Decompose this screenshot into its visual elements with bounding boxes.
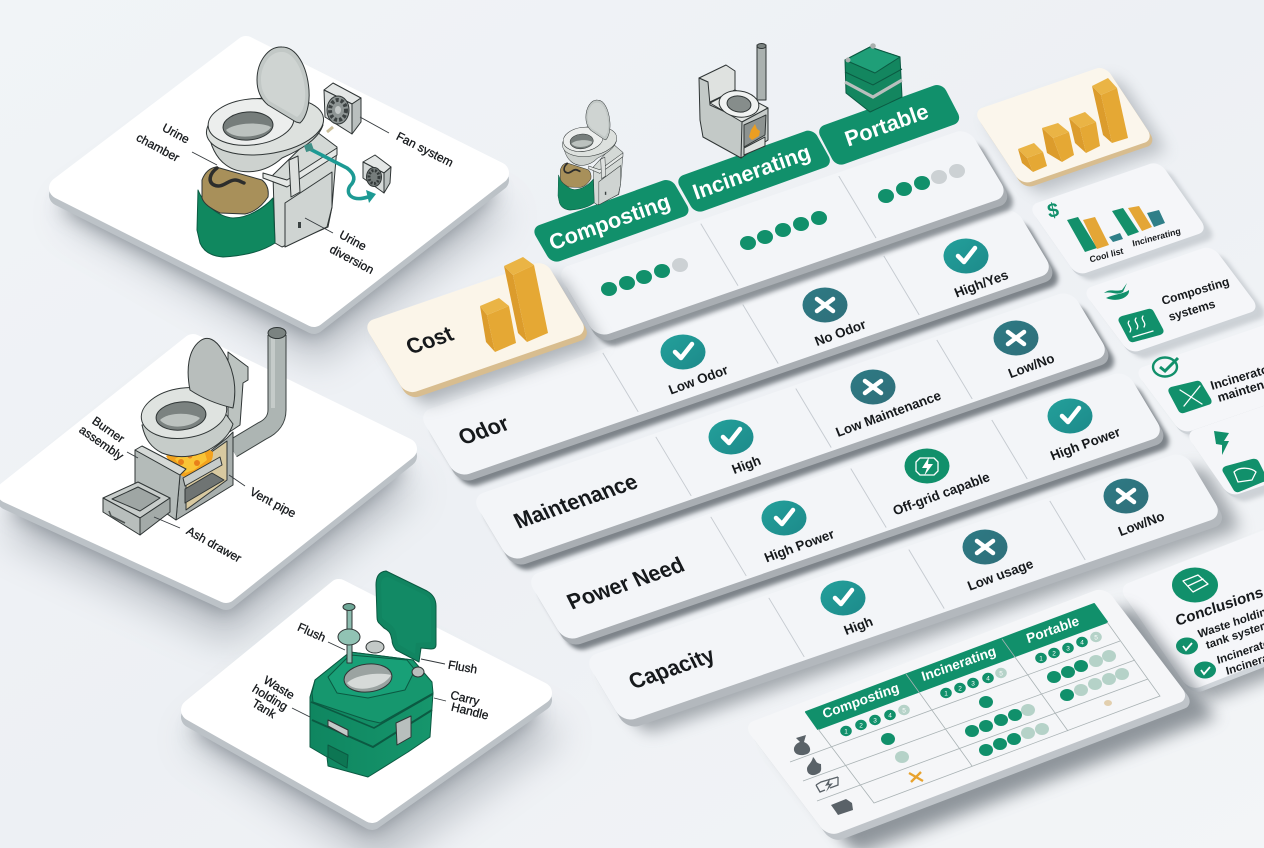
cell: low usage: Low usage xyxy=(965,556,1035,594)
dot numbers: 1 xyxy=(844,728,848,736)
dot numbers: 4 xyxy=(888,712,892,720)
dot numbers: 1 xyxy=(1039,656,1043,662)
row label: maintenance: Maintenance xyxy=(509,469,642,533)
label: waste holding tank: holding xyxy=(250,682,290,714)
illustration: composting toilet xyxy=(197,47,337,257)
icon: large fan xyxy=(324,83,361,134)
label: urine diversion: Urine xyxy=(337,228,369,254)
card: cost label xyxy=(363,257,603,409)
cell: no odor xyxy=(802,288,868,349)
icon: battery xyxy=(816,777,838,792)
panel: summary table: Incinerating xyxy=(920,643,998,684)
cell: high power composting: High Power xyxy=(762,526,836,565)
icon: dollar sign: $ xyxy=(1045,199,1061,223)
row label: capacity: Capacity xyxy=(624,642,719,694)
label: carry handle: Carry xyxy=(449,688,481,708)
card: rising bars xyxy=(973,64,1167,197)
cell: high capacity: High xyxy=(842,614,875,638)
header tab: portable xyxy=(816,83,962,167)
illustration: small composting toilet xyxy=(558,100,623,210)
cell: off-grid capable: Off-grid capable xyxy=(891,469,992,518)
label: burner assembly: Burner xyxy=(90,414,127,446)
dot numbers: 2 xyxy=(958,686,962,692)
dot numbers: 5 xyxy=(1094,634,1098,642)
label: waste holding tank: Waste xyxy=(261,673,297,702)
label: vent pipe: Vent pipe xyxy=(247,485,299,521)
icon: conclusion check 1 xyxy=(1176,638,1198,654)
cell: low usage xyxy=(962,530,1035,594)
cell: no odor: No Odor xyxy=(813,317,868,349)
panel: summary table: Portable xyxy=(1025,613,1081,646)
icon: leaf xyxy=(1104,283,1129,300)
cell: low odor xyxy=(660,334,730,397)
cell: low or no maintenance xyxy=(994,320,1057,381)
cell: high capacity xyxy=(820,580,875,638)
card: incinerators maintenance xyxy=(1134,321,1264,442)
dot numbers: 2 xyxy=(859,722,863,730)
cell: low maintenance: Low Maintenance xyxy=(833,388,943,440)
illustration: small incinerating toilet xyxy=(699,44,768,158)
label: fan system: Fan system xyxy=(394,129,456,170)
illustration: portable toilet xyxy=(310,571,436,777)
icon: conclusion check 2 xyxy=(1194,662,1216,678)
label: waste holding tank: Tank xyxy=(250,696,279,722)
icon: list circle xyxy=(1172,568,1218,602)
row: capacity xyxy=(584,448,1243,739)
icon: tools square xyxy=(1168,381,1212,413)
icon: tray square xyxy=(1222,459,1264,492)
illustration: small portable toilet xyxy=(845,43,902,112)
card: composting systems xyxy=(1082,244,1264,362)
cell: low odor: Low Odor xyxy=(666,362,730,397)
row: odor xyxy=(418,206,1063,490)
rating dots: incinerating cost xyxy=(740,211,827,250)
dot numbers xyxy=(844,634,1098,736)
label: ash drawer: Ash drawer xyxy=(184,524,244,565)
icon: lightning bolt xyxy=(1214,431,1229,455)
rating dots: composting cost xyxy=(601,258,688,296)
dot numbers: 1 xyxy=(944,690,948,698)
dot numbers: 5 xyxy=(902,708,906,714)
card: conclusions xyxy=(1118,518,1264,705)
chart: cost bars xyxy=(480,257,548,352)
dot numbers: 5 xyxy=(999,670,1003,678)
label: waste holding tank xyxy=(250,673,297,722)
dot numbers: 3 xyxy=(1066,646,1070,652)
dot numbers: 4 xyxy=(986,676,990,682)
header tab: incinerating xyxy=(675,128,833,214)
cell: low or no capacity: Low/No xyxy=(1116,509,1167,539)
card: composting systems: Composting xyxy=(1160,274,1231,308)
header tab: portable: Portable xyxy=(841,98,932,151)
card: cost comparison mini chart: Cool list xyxy=(1089,246,1124,264)
dot numbers: 2 xyxy=(1052,650,1056,658)
panel: summary table: Composting xyxy=(821,680,901,721)
card: composting systems: systems xyxy=(1167,297,1217,324)
cell: low or no capacity xyxy=(1104,478,1167,539)
row: cost dots xyxy=(556,127,1018,350)
panel: summary table xyxy=(743,583,1217,848)
row label: power need: Power Need xyxy=(563,552,688,614)
cell: high power composting xyxy=(762,500,836,565)
cell: high power portable xyxy=(1048,398,1122,463)
label: flush left: Flush xyxy=(295,620,328,645)
label: burner assembly: assembly xyxy=(77,422,126,463)
rating dots: portable cost xyxy=(878,164,965,203)
icon: orange cross xyxy=(909,772,923,782)
cell: high maintenance xyxy=(708,420,763,477)
panel: portable toilet diagram xyxy=(185,571,565,848)
row: power need xyxy=(526,369,1174,654)
label: flush right: Flush xyxy=(447,658,478,677)
label: urine diversion: diversion xyxy=(327,242,376,277)
cell: high maintenance: High xyxy=(730,453,763,477)
label: carry handle: Handle xyxy=(450,700,490,723)
card: conclusions: Conclusions xyxy=(1174,584,1264,630)
dot numbers: 3 xyxy=(971,680,975,688)
arrow: air flow xyxy=(304,143,376,203)
cell: high power portable: High Power xyxy=(1048,424,1122,463)
row label: odor: Odor xyxy=(454,410,514,450)
header tab: incinerating: Incinerating xyxy=(689,139,814,205)
cell: low or no maintenance: Low/No xyxy=(1006,351,1057,381)
icon: check ring xyxy=(1153,358,1178,376)
cell: high or yes xyxy=(944,238,1011,300)
icon: money bag xyxy=(794,735,810,755)
card: cost comparison mini chart: Incinerating xyxy=(1131,226,1181,248)
row label: cost: Cost xyxy=(402,321,458,359)
table header band xyxy=(806,604,1107,729)
card: power xyxy=(1185,384,1264,505)
panel: composting toilet diagram xyxy=(60,47,510,365)
illustration: incinerating toilet xyxy=(103,328,286,535)
dot numbers: 3 xyxy=(873,718,877,724)
header tab: composting: Composting xyxy=(546,189,673,255)
icon: heat square xyxy=(1118,309,1164,342)
label: carry handle xyxy=(449,688,490,723)
dot numbers: 4 xyxy=(1080,640,1084,646)
card: cost comparison mini chart xyxy=(1028,160,1217,284)
label: urine chamber: chamber xyxy=(134,130,182,165)
label: urine chamber: Urine xyxy=(160,121,192,147)
icon: folder xyxy=(831,799,853,815)
icon: flame xyxy=(807,757,821,775)
panel: incinerating toilet diagram xyxy=(0,328,420,645)
cell: high or yes: High/Yes xyxy=(952,267,1011,300)
table dots xyxy=(840,632,1129,763)
label: urine chamber xyxy=(134,121,192,165)
header tab: composting xyxy=(531,178,692,264)
row: maintenance xyxy=(471,289,1119,574)
icon: small fan xyxy=(363,155,391,193)
